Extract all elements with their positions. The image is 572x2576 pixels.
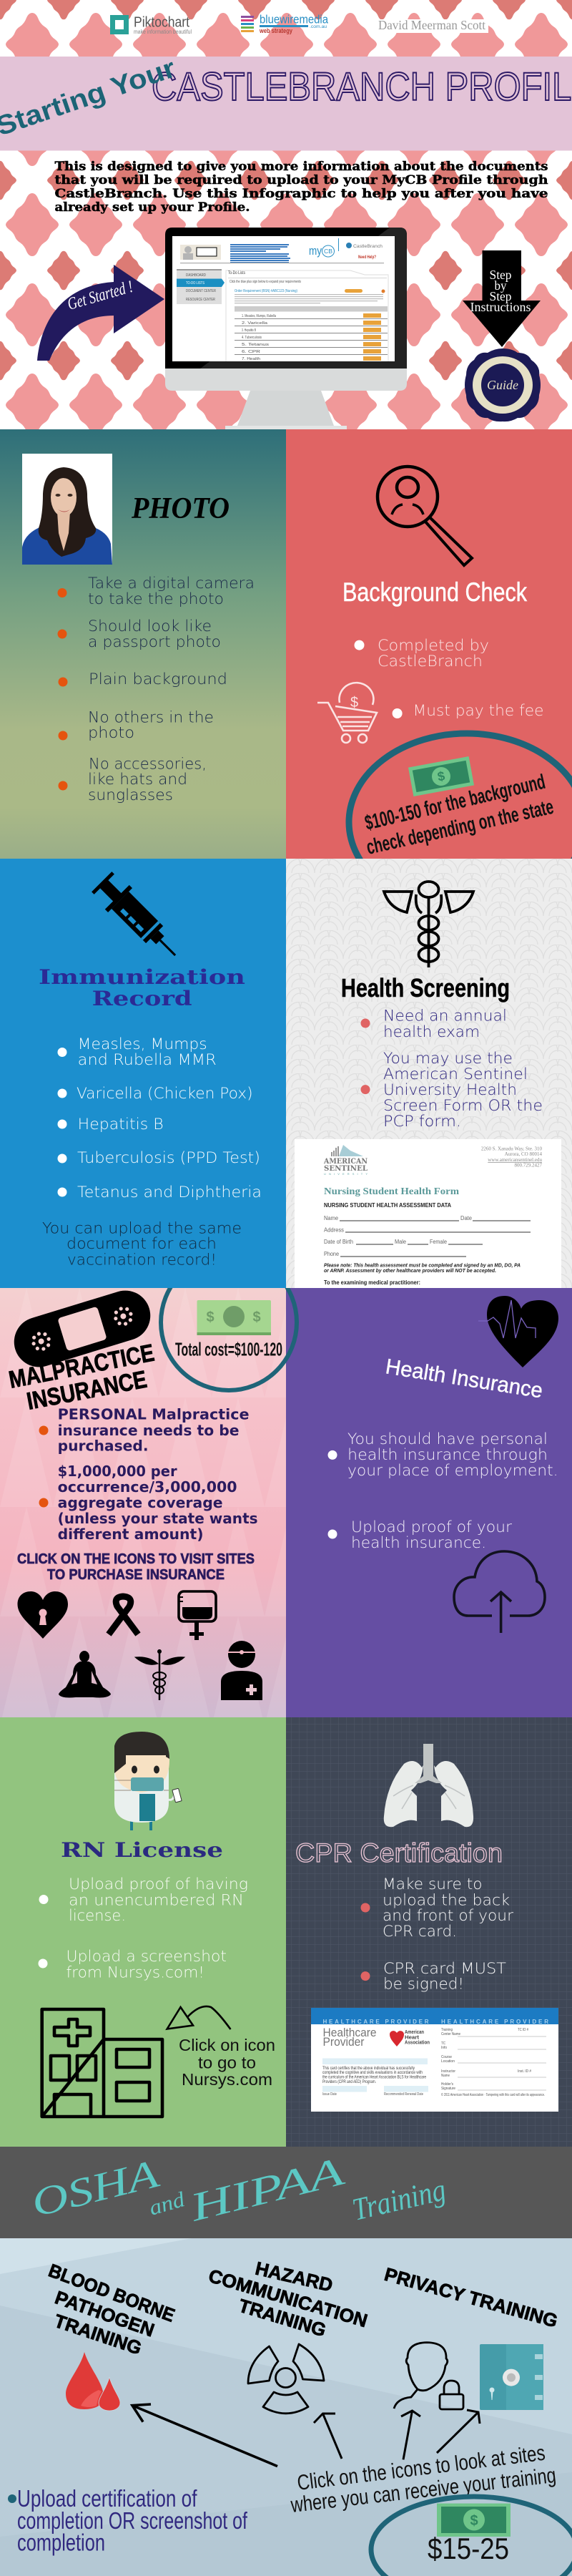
bullet: card must be signed: be signed! <box>383 1976 464 1993</box>
image: CPR card: American <box>405 2029 424 2035</box>
heading: Photo: PHOTO <box>131 492 230 525</box>
icon: banknote <box>197 1300 271 1335</box>
bullets: malpractice requirements: different amount) <box>58 1526 204 1543</box>
form image: Nursing Student Health Form: 2260 S. Xanadu Way, Ste. 310 <box>481 1146 542 1152</box>
bullets: photo requirements: No accessories, <box>89 756 207 773</box>
image: CPR card: Holder's <box>441 2082 453 2087</box>
panel: Health Screening <box>286 859 572 1288</box>
screenshot: to-do list table <box>226 270 388 361</box>
arrow: step by step instructions <box>463 250 541 347</box>
arrow: to radiation symbol <box>314 2414 342 2459</box>
heading: Background Check: Background Check <box>342 577 527 607</box>
note: same document for each vaccination: document for each <box>66 1235 217 1252</box>
heading: Health Insurance: Health Insurance <box>384 1355 544 1403</box>
bullet: card must be signed: CPR card MUST <box>383 1960 506 1977</box>
image: CPR card: the curriculum of the American Heart Association BLS for Healthcare <box>322 2075 427 2079</box>
image: CPR card: Signature <box>441 2087 455 2091</box>
bullet: personal health insurance: health insurance through <box>347 1446 548 1463</box>
image: CPR card: Course <box>441 2055 452 2059</box>
label: total cost: Total cost=$100-120 <box>175 1338 282 1360</box>
panel: Photo <box>0 429 286 859</box>
logo: Piktochart: Piktochart <box>134 14 189 30</box>
arrow: Get Started: Get Started ! <box>65 278 135 314</box>
bullets: health screening: health exam <box>383 1023 480 1040</box>
screenshot: to-do list table: 1. Measles, Mumps, Rubella <box>242 314 276 318</box>
bullets: malpractice requirements: aggregate coverage <box>58 1494 223 1511</box>
screenshot: sidebar menu: DASHBOARD <box>186 273 206 278</box>
banner: OSHA and HIPAA Training: and <box>147 2187 188 2220</box>
icon: meditating figure <box>59 1651 111 1697</box>
icon: banknote: $ <box>206 1309 214 1325</box>
screenshot: to-do list table: 4. Tuberculosis <box>242 336 262 340</box>
heading: Hazard Communication Training: TRAINING <box>236 2295 329 2341</box>
bullet: upload certification: Upload certification of <box>17 2485 197 2512</box>
bullet: completed by CastleBranch <box>355 637 489 670</box>
heading: Immunization Record <box>39 965 245 1010</box>
bullets: malpractice requirements: (unless your state wants <box>58 1510 258 1527</box>
icon: magnifier with person <box>378 467 472 565</box>
bullets: malpractice requirements <box>39 1406 258 1543</box>
icon: banknote: $ <box>252 1309 261 1325</box>
panel: Health Insurance <box>286 1288 572 1717</box>
label: click on icon: Click on icon <box>179 2036 275 2054</box>
form image: Nursing Student Health Form: Date <box>460 1215 473 1221</box>
arrow: step by step instructions: Step <box>489 289 512 303</box>
instruction: click on the icons: TO PURCHASE INSURANCE <box>47 1567 225 1583</box>
bullets: malpractice requirements: $1,000,000 per <box>58 1463 177 1480</box>
form image: Nursing Student Health Form: 800.729.2427 <box>515 1162 542 1168</box>
bullets: photo requirements <box>57 575 255 804</box>
heading: RN License: RN License <box>61 1838 223 1862</box>
heading: Malpractice Insurance: MALPRACTICE <box>6 1340 157 1394</box>
note: same document for each vaccination: You can upload the same <box>42 1219 242 1236</box>
banner: OSHA and HIPAA Training: Training <box>349 2172 449 2228</box>
callout: total cost circle <box>159 1288 299 1392</box>
bullets: photo requirements: like hats and <box>88 771 187 788</box>
bullet: upload screenshot: Upload a screenshot <box>66 1948 227 1965</box>
title banner <box>0 53 572 151</box>
bullets: malpractice requirements: purchased. <box>58 1438 149 1455</box>
screenshot: sidebar menu: DOCUMENT CENTER <box>186 289 216 293</box>
image: CPR card: Healthcare <box>323 2026 376 2039</box>
heading: CPR Certification: CPR Certification <box>295 1838 503 1868</box>
icon: person with padlock <box>394 2343 463 2409</box>
bullet: must pay the fee: Must pay the fee <box>413 702 543 719</box>
screenshot: to-do list table: 7. Health <box>242 357 260 361</box>
logo: bluewiremedia: web strategy <box>259 27 292 34</box>
form image: Nursing Student Health Form: To the examining medical practitioner: <box>324 1279 420 1286</box>
screenshot: myCB logo <box>309 238 383 260</box>
icon: blood drops <box>66 2352 120 2411</box>
logo: David Meerman Scott: David Meerman Scott <box>378 18 485 32</box>
bullets: photo requirements: Plain background <box>89 670 227 688</box>
logo: bluewiremedia: .com.au <box>310 25 327 29</box>
icon: medical caduceus <box>135 1649 184 1700</box>
bullets: malpractice requirements: occurrence/3,000,000 <box>58 1478 237 1496</box>
bullets: health screening: You may use the <box>383 1050 513 1067</box>
bullet: personal health insurance <box>327 1430 558 1479</box>
instruction: click on the icons: CLICK ON THE ICONS TO VISIT SITES <box>17 1551 255 1567</box>
callout: background check fee <box>346 730 572 859</box>
bullets: health screening: University Health <box>383 1081 517 1098</box>
image: CPR card: completed the cognitive and skills evaluations in accordance with <box>322 2071 423 2075</box>
bullet: completed by CastleBranch: CastleBranch <box>378 653 483 670</box>
image: CPR card: Location <box>441 2059 455 2064</box>
icon: ribbon <box>109 1596 138 1634</box>
bullet: upload proof of license: an unencumbered RN <box>69 1892 244 1909</box>
intro paragraph: already set up your Profile. <box>54 200 250 215</box>
bullet: back and front of card: and front of your <box>383 1907 513 1924</box>
banner: OSHA and HIPAA Training <box>0 2147 572 2238</box>
bullet: back and front of card: Make sure to <box>383 1875 482 1893</box>
bullet: personal health insurance: You should have personal <box>347 1430 548 1448</box>
image: CPR card: Issue Date <box>322 2092 337 2097</box>
image: CPR card: Provider <box>323 2035 365 2049</box>
image: CPR card: Info <box>441 2046 447 2050</box>
bullet: personal health insurance: your place of employment. <box>347 1462 558 1479</box>
heading: Blood Borne Pathogen Training: BLOOD BORNE <box>46 2260 178 2326</box>
heading: Hazard Communication Training: HAZARD <box>253 2258 335 2296</box>
panel: header with patterned background <box>0 0 572 429</box>
intro paragraph: CastleBranch. Use this Infographic to help you after you have <box>54 187 548 201</box>
arrow: step by step instructions: Step <box>489 268 512 282</box>
intro paragraph <box>54 160 548 215</box>
form image: Nursing Student Health Form: SENTINEL <box>324 1165 368 1173</box>
heading: Blood Borne Pathogen Training: PATHOGEN <box>52 2286 157 2341</box>
screenshot: to-do list table: 3. Hepatitis B <box>242 328 256 333</box>
icon: lungs <box>384 1744 473 1827</box>
bullets: health screening: PCP form. <box>383 1113 461 1130</box>
screenshot: myCB logo: CastleBranch <box>353 245 383 249</box>
icon: caduceus <box>384 882 473 967</box>
form image: Nursing Student Health Form: Male <box>395 1239 407 1245</box>
bullet: upload proof of license <box>39 1875 248 1924</box>
screenshot: to-do list table: 6. CPR <box>242 350 261 354</box>
bullet: upload proof: health insurance. <box>351 1534 486 1551</box>
heading: Malpractice Insurance <box>6 1340 157 1415</box>
form image: Nursing Student Health Form: Phone <box>324 1251 339 1257</box>
image: CPR card: Heart <box>405 2034 420 2041</box>
form image: Nursing Student Health Form: UNIVERSITY <box>324 1172 368 1176</box>
form image: Nursing Student Health Form: NURSING STUDENT HEALTH ASSESSMENT DATA <box>324 1202 451 1209</box>
icon: bandage <box>8 1284 157 1373</box>
icon: shopping cart with dollar <box>317 683 377 743</box>
screenshot: profile photo placeholder <box>180 245 221 260</box>
image: CPR card: Name <box>441 2074 450 2078</box>
bullets: photo requirements: No others in the <box>88 708 214 726</box>
form image: Nursing Student Health Form: AMERICAN <box>323 1158 368 1166</box>
bullets: vaccinations: Varicella (Chicken Pox) <box>77 1085 253 1102</box>
screenshot: myCB logo: CB <box>324 248 332 255</box>
arrow: to safe <box>437 2410 480 2453</box>
image: CPR card: Training <box>441 2028 453 2032</box>
icon: nurse <box>221 1641 262 1700</box>
heading: Health Screening: Health Screening <box>341 973 510 1002</box>
screenshot: myCB logo: Need Help? <box>358 255 376 260</box>
arrow: curved to hospital icon <box>167 2006 230 2029</box>
bullets: photo requirements: photo <box>88 724 134 741</box>
form image: Nursing Student Health Form: Aurora, CO 80014 <box>505 1151 542 1157</box>
screenshot: sidebar menu <box>177 269 225 304</box>
bullets: vaccinations: Tetanus and Diphtheria <box>77 1184 262 1201</box>
form image: Nursing Student Health Form: www.americansentinel.edu <box>488 1157 542 1163</box>
heading: Blood Borne Pathogen Training <box>46 2260 178 2359</box>
image: CPR card: This card certifies that the above individual has successfully <box>322 2067 415 2071</box>
screenshot: to-do list table: 5. Tetanus <box>242 343 270 347</box>
bullet: upload proof <box>327 1518 512 1551</box>
bullet: upload screenshot <box>39 1948 227 1981</box>
form image: Nursing Student Health Form: Please note: This health assessment must be completed and signed by an MD, DO, PA <box>324 1262 521 1269</box>
intro paragraph: that you will be required to upload to your MyCB Profile through <box>54 173 548 187</box>
screenshot: welcome text <box>230 244 290 263</box>
icon: shopping cart with dollar: $ <box>350 695 358 711</box>
bullets: photo requirements: Should look like <box>88 618 212 635</box>
bullet: completed by CastleBranch: Completed by <box>378 637 489 654</box>
image: CPR card: Center Name <box>441 2032 460 2036</box>
heading: Privacy Training: PRIVACY TRAINING <box>382 2263 560 2332</box>
heading: Immunization Record: Record <box>92 987 192 1010</box>
callout: training cost <box>371 2497 572 2576</box>
screenshot: to-do list table: Order Requirement (BSN) #ABC123 (Nursing) <box>235 289 297 293</box>
bullets: photo requirements: to take the photo <box>88 590 224 608</box>
monitor with MyCB screenshot <box>165 228 407 429</box>
heading: Hazard Communication Training: COMMUNICATION <box>206 2265 370 2331</box>
form image: Nursing Student Health Form: Date of Birth <box>324 1239 353 1245</box>
logo: Piktochart <box>110 14 192 35</box>
panel: RN License <box>0 1717 286 2147</box>
callout: training cost: $15-25 <box>428 2532 509 2565</box>
bullets: vaccinations <box>57 1035 262 1201</box>
image: CPR card: TC ID # <box>518 2028 528 2032</box>
bullets: vaccinations: Tuberculosis (PPD Test) <box>77 1149 260 1166</box>
form image: Nursing Student Health Form: Nursing Student Health Form <box>324 1186 459 1197</box>
logo: bluewiremedia <box>241 13 328 34</box>
image: CPR card: HEALTHCARE PROVIDER <box>323 2019 429 2025</box>
image: CPR card <box>311 2008 558 2112</box>
bullet: upload certification <box>8 2485 248 2556</box>
image: CPR card: Association <box>405 2039 430 2045</box>
bullets: health screening: Screen Form OR the <box>383 1097 543 1114</box>
screenshot: myCB logo: my <box>309 244 322 258</box>
bullets: health screening <box>360 1008 543 1130</box>
bullet: back and front of card <box>360 1875 513 1940</box>
bullets: malpractice requirements: insurance needs to be <box>58 1422 240 1439</box>
intro paragraph: This is designed to give you more information about the documents <box>54 160 548 174</box>
sample passport photo <box>22 454 112 565</box>
icon: cloud upload <box>454 1551 545 1633</box>
arrow: step by step instructions: Instructions <box>470 300 531 314</box>
panel: Background Check <box>286 429 572 859</box>
image: CPR card: Inst. ID # <box>518 2069 531 2074</box>
panel: Malpractice Insurance <box>0 1284 286 1717</box>
bullet: upload certification: completion <box>17 2529 105 2556</box>
bullet: back and front of card: CPR card. <box>383 1923 457 1940</box>
arrow: Get Started <box>37 265 164 361</box>
bullets: photo requirements: sunglasses <box>88 786 173 804</box>
bullets: vaccinations: Measles, Mumps <box>78 1035 207 1053</box>
note: same document for each vaccination <box>42 1219 242 1268</box>
image: CPR card: Recommended Renewal Date <box>384 2092 423 2097</box>
arrow: step by step instructions: by <box>495 278 506 293</box>
screenshot: to-do list table: To-Do Lists <box>228 271 245 275</box>
icon: heart with ECG line <box>478 1296 558 1367</box>
note: same document for each vaccination: vaccination record! <box>67 1251 217 1268</box>
bullets: vaccinations: and Rubella MMR <box>78 1051 217 1068</box>
image: CPR card: TC <box>441 2041 445 2046</box>
panel: Immunization Record <box>0 859 286 1288</box>
instruction: click on the icons <box>17 1551 255 1583</box>
banner: OSHA and HIPAA Training: HIPAA <box>185 2149 349 2230</box>
bullet: upload proof of license: license. <box>69 1907 126 1924</box>
bullet: card must be signed <box>360 1960 506 1993</box>
bullet: upload proof: Upload proof of your <box>351 1518 512 1536</box>
bullets: photo requirements: a passport photo <box>88 633 221 650</box>
logo: bluewiremedia: bluewiremedia <box>260 13 328 26</box>
image: CPR card: Providers (CPR and AED) Program. <box>322 2080 376 2084</box>
image: CPR card: HEALTHCARE PROVIDER <box>441 2019 548 2025</box>
image: CPR card: Instructor <box>441 2069 455 2074</box>
badge: Guide <box>465 348 541 421</box>
bullets: photo requirements: Take a digital camera <box>88 575 255 592</box>
bullets: health screening: Need an annual <box>383 1008 507 1025</box>
bullet: back and front of card: upload the back <box>383 1892 510 1909</box>
screenshot: sidebar menu: TO-DO LISTS <box>186 281 205 286</box>
panel: CPR Certification <box>286 1717 572 2147</box>
arrow: to person <box>401 2411 420 2459</box>
bullet: upload proof of license: Upload proof of having <box>69 1875 248 1893</box>
icon: hospital <box>42 2009 162 2117</box>
icon: syringe <box>89 869 187 967</box>
illustration: masked nurse <box>114 1732 182 1830</box>
bullet: upload certification: completion OR screenshot of <box>17 2507 248 2534</box>
bullet: upload screenshot: from Nursys.com! <box>66 1963 204 1981</box>
logo: Piktochart: make information beautiful <box>134 29 192 35</box>
panel: OSHA and HIPAA training content <box>0 2238 572 2576</box>
banner: OSHA and HIPAA Training: OSHA <box>27 2152 164 2226</box>
arrow: to blood drops <box>132 2404 277 2467</box>
icon: heart with keyhole <box>17 1591 68 1639</box>
form image: Nursing Student Health Form: Address <box>324 1227 344 1234</box>
heading: Immunization Record: Immunization <box>39 965 245 989</box>
label: click on icon: Nursys.com <box>182 2070 272 2089</box>
callout: training cost: $ <box>470 2513 478 2529</box>
form image: Nursing Student Health Form: Name <box>324 1215 339 1221</box>
screenshot: to-do list table: 2. Varicella <box>242 321 267 326</box>
label: click on icon <box>179 2036 275 2089</box>
screenshot: to-do list table: Click the blue plus sign below to expand your requirements <box>230 280 301 284</box>
form image: Nursing Student Health Form <box>295 1139 561 1288</box>
callout: background check fee: $ <box>436 769 446 784</box>
icon: safe <box>480 2344 543 2410</box>
heading: Blood Borne Pathogen Training: TRAINING <box>51 2310 144 2359</box>
bullets: vaccinations: Hepatitis B <box>78 1116 164 1133</box>
form image: Nursing Student Health Form: Female <box>430 1239 447 1245</box>
heading: Malpractice Insurance: INSURANCE <box>24 1366 149 1415</box>
bullets: health screening: American Sentinel <box>383 1065 528 1083</box>
icon: radiation symbol <box>248 2344 324 2414</box>
screenshot: sidebar menu: RESOURCE CENTER <box>186 298 215 302</box>
label: click on icon: to go to <box>198 2054 256 2072</box>
bullets: malpractice requirements: PERSONAL Malpractice <box>58 1406 250 1423</box>
form image: Nursing Student Health Form: or ARNP. Assessment by other healthcare providers will NOT be accepted. <box>324 1267 496 1274</box>
icon: IV bag <box>179 1591 216 1640</box>
badge: Guide: Guide <box>487 378 518 392</box>
